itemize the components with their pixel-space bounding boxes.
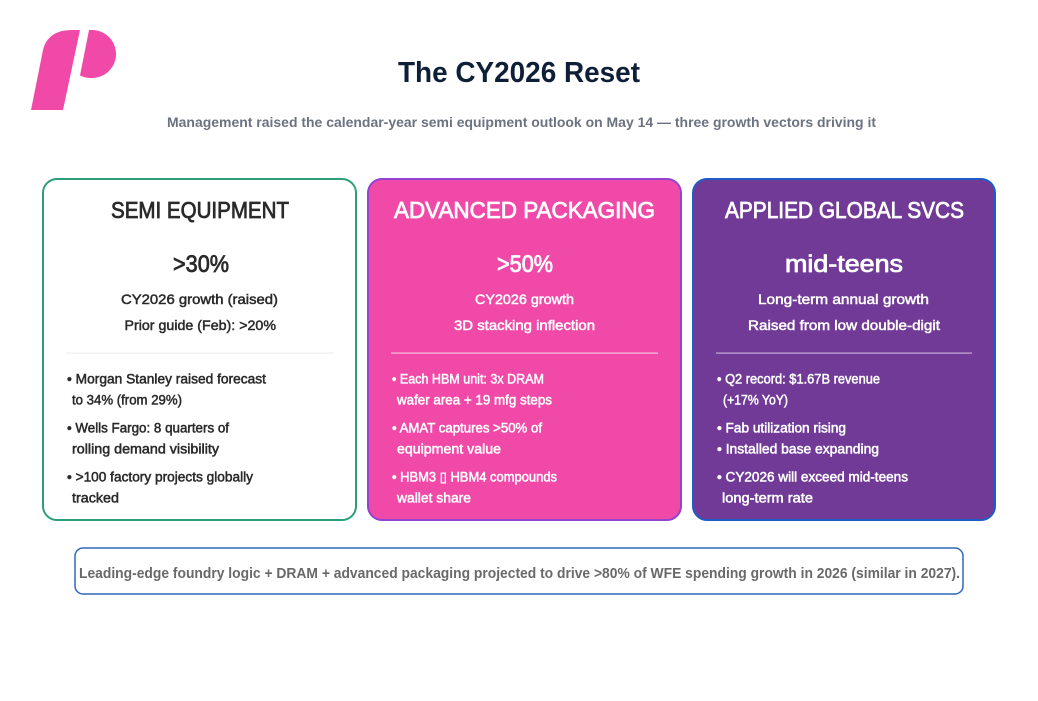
bullet list: applied global services: • Fab utilization rising xyxy=(717,420,846,436)
metric caption: Long-term annual growth xyxy=(758,291,929,307)
bullet list: semi equipment: • Morgan Stanley raised forecast xyxy=(67,372,266,386)
metric caption xyxy=(121,291,278,333)
metric caption: CY2026 growth xyxy=(475,291,574,307)
bullet list: advanced packaging: • Each HBM unit: 3x DRAM xyxy=(392,372,544,386)
bullet list: semi equipment: • Wells Fargo: 8 quarters of xyxy=(67,420,229,436)
metric: mid-teens: mid-teens xyxy=(785,251,903,278)
metric: greater than 50 percent: >50% xyxy=(497,251,553,278)
bullet list: applied global services: (+17% YoY) xyxy=(723,392,788,408)
metric caption: CY2026 growth (raised) xyxy=(121,291,278,307)
metric caption xyxy=(748,291,940,333)
metric: greater than 30 percent: >30% xyxy=(173,251,229,278)
bullet list: semi equipment: rolling demand visibility xyxy=(72,442,219,456)
bullet list: semi equipment: tracked xyxy=(72,490,119,506)
bullet list: advanced packaging: wallet share xyxy=(396,490,471,506)
panel: advanced packaging xyxy=(368,179,681,520)
callout text: Leading-edge foundry logic + DRAM + advanced packaging projected to drive >80% of WFE spending growth in 2026 (similar in 2027). xyxy=(79,566,960,582)
metric caption: Raised from low double-digit xyxy=(748,317,940,333)
metric caption xyxy=(454,291,595,333)
panel heading: applied global svcs: APPLIED GLOBAL SVCS xyxy=(725,197,964,223)
bullet list: advanced packaging: • HBM3 ▯ HBM4 compounds xyxy=(392,470,557,484)
bullet list: advanced packaging: • AMAT captures >50% of xyxy=(392,420,542,436)
bullet list: advanced packaging: wafer area + 19 mfg steps xyxy=(396,392,552,408)
subtitle: Management raised the calendar-year semi equipment outlook on May 14 — three growth vectors driving it xyxy=(167,114,876,130)
metric caption: 3D stacking inflection xyxy=(454,317,595,333)
bullet list: applied global services: • CY2026 will exceed mid-teens xyxy=(717,470,908,484)
bullet list: advanced packaging: equipment value xyxy=(397,442,501,456)
bullet list: applied global services: • Installed base expanding xyxy=(717,442,879,456)
bullet list: semi equipment xyxy=(67,372,266,506)
panel heading: semi equipment: SEMI EQUIPMENT xyxy=(111,197,289,223)
logo xyxy=(31,30,116,110)
bullet list: applied global services xyxy=(717,372,908,506)
metric caption: Prior guide (Feb): >20% xyxy=(124,317,276,333)
bullet list: applied global services: long-term rate xyxy=(722,490,813,506)
panel: applied global services xyxy=(693,179,995,520)
bullet list: semi equipment: • >100 factory projects globally xyxy=(67,470,253,484)
title: The CY2026 Reset xyxy=(398,57,640,89)
bullet list: semi equipment: to 34% (from 29%) xyxy=(72,392,182,408)
callout: WFE spending xyxy=(75,548,963,594)
panel: semi equipment xyxy=(43,179,356,520)
panel heading: advanced packaging: ADVANCED PACKAGING xyxy=(394,197,655,223)
bullet list: applied global services: • Q2 record: $1.67B revenue xyxy=(717,372,880,386)
bullet list: advanced packaging xyxy=(392,372,557,506)
